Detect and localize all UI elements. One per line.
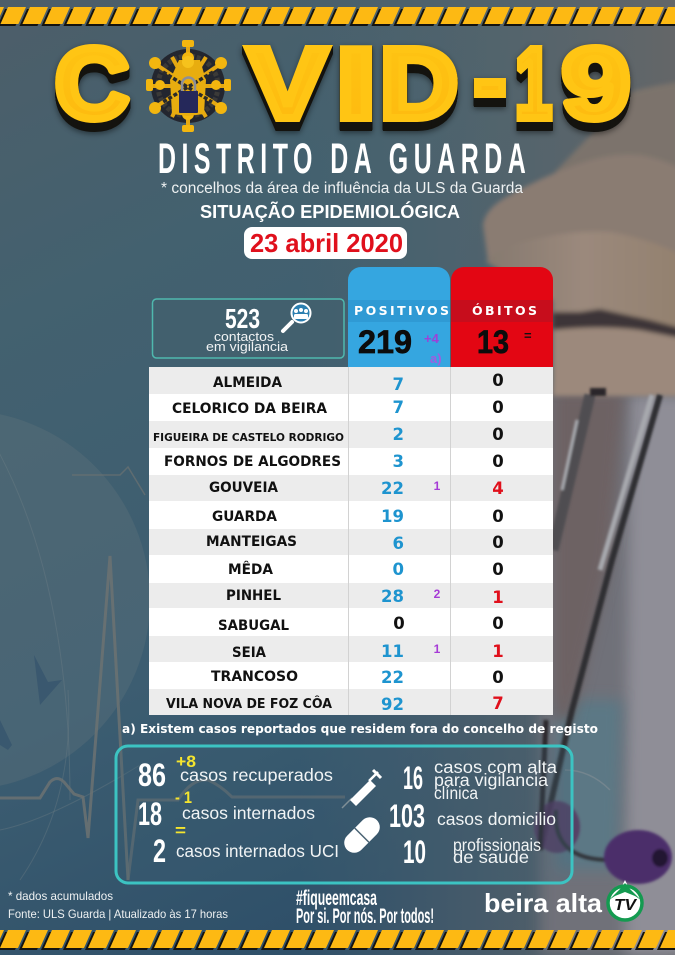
panel: positives header [348,267,450,367]
ICU: casos internados UCI [176,841,339,861]
health workers: 10 [403,834,426,870]
table: cases by municipality: 11 [381,642,404,661]
table: cases by municipality: 3 [393,452,404,471]
title: COVID-19: 9 [562,28,630,140]
subheading: SITUAÇÃO EPIDEMIOLÓGICA [200,201,460,222]
footnote: area of influence: * concelhos da área de influência da ULS da Guarda [161,180,523,197]
bottom hazard stripe [0,930,675,950]
table: cases by municipality: SEIA [232,645,267,661]
hospitalised: casos internados [182,803,315,823]
panel: deaths header [451,267,553,367]
table: cases by municipality: MANTEIGAS [206,534,297,550]
icon: virus with chain and padlock [146,40,231,132]
table: cases by municipality: SABUGAL [218,618,289,634]
table: cases by municipality: 19 [381,507,404,526]
heading: Distrito da Guarda: DISTRITO DA GUARDA [158,135,526,183]
table: cases by municipality: 2 [434,587,441,601]
table: cases by municipality: GUARDA [212,509,278,525]
table: cases by municipality [149,367,553,715]
hospitalised: - 1 [175,788,192,807]
logo: beira alta TV: beira alta [484,888,603,918]
hospitalised: 18 [138,796,162,832]
logo: beira alta TV [484,880,642,920]
panel: positives header: +4 [424,331,440,346]
table: cases by municipality: 0 [393,560,404,579]
table: cases by municipality: 0 [492,533,504,552]
footnote: source: Fonte: ULS Guarda | Atualizado às 17 horas [8,907,228,921]
panel: positives header: a) [430,351,442,366]
discharged: 16 [403,760,423,796]
table: cases by municipality: 7 [393,398,404,417]
at home: 103 [389,798,425,834]
hashtag slogan [296,887,434,928]
title: COVID-19: 1 [515,28,552,140]
at home: casos domicilio [437,809,556,829]
panel: deaths header: ÓBITOS [472,303,537,318]
panel: summary statistics [116,746,572,883]
panel: deaths header: = [524,328,532,343]
table: cases by municipality: CELORICO DA BEIRA [172,401,328,417]
title: COVID-19 [55,24,630,140]
ICU [153,821,339,869]
table: cases by municipality: 22 [381,479,404,498]
table: cases by municipality: FIGUEIRA DE CASTELO RODRIGO [153,431,344,444]
health workers [403,834,541,870]
logo: beira alta TV: TV [614,897,637,914]
table: cases by municipality: 22 [381,668,404,687]
table: cases by municipality: 0 [492,507,504,526]
table: cases by municipality: 0 [492,452,504,471]
icon: syringe [342,770,381,808]
stethoscope tubes [534,392,672,884]
table: cases by municipality: VILA NOVA DE FOZ CÔA [166,694,333,712]
footnote: source: * dados acumulados [8,889,113,903]
hashtag slogan: Por si. Por nós. Por todos! [296,905,434,928]
discharged: clínica [434,783,478,803]
title: COVID-19: C [55,28,129,140]
table: cases by municipality: 6 [393,534,404,553]
health workers: de saude [453,847,529,867]
icon: magnifier with people [283,304,310,331]
table: cases by municipality: 0 [393,614,405,633]
ICU: = [175,821,186,840]
title: COVID-19: V [248,28,327,140]
panel: deaths header: 13 [477,324,509,360]
discharged [403,757,557,803]
panel: positives header: POSITIVOS [354,303,449,318]
table: cases by municipality: PINHEL [226,588,281,604]
hashtag slogan: #fiqueemcasa [296,887,377,910]
icon: pill [340,813,384,857]
panel: contacts under surveillance: em vigilancia [206,340,288,354]
table: cases by municipality: 2 [393,425,404,444]
title: COVID-19: D [380,28,458,140]
table: cases by municipality: MÊDA [228,561,274,578]
hand fingers [483,82,675,396]
title: COVID-19: I [336,28,376,140]
table: cases by municipality: 0 [492,560,504,579]
recovered: casos recuperados [180,765,333,785]
table: cases by municipality: 0 [492,371,504,390]
date pill: 23 abril 2020 [250,228,403,258]
table: cases by municipality: 0 [492,668,504,687]
panel: contacts under surveillance [152,299,344,358]
panel: contacts under surveillance: contactos [214,330,274,344]
table: cases by municipality: 92 [381,695,404,714]
recovered: 86 [138,757,166,793]
note a): a) Existem casos reportados que residem fora do concelho de registo [122,721,598,736]
table: cases by municipality: 0 [492,425,504,444]
globe [0,410,150,790]
table: cases by municipality: 4 [492,479,504,498]
table: cases by municipality: FORNOS DE ALGODRES [164,454,341,470]
panel: contacts under surveillance: 523 [225,303,260,334]
table: cases by municipality: 7 [492,694,504,713]
table: cases by municipality: ALMEIDA [213,375,283,391]
hospitalised [138,788,315,832]
at home [389,798,556,834]
top hazard stripe [0,7,675,26]
table: cases by municipality: 1 [492,642,504,661]
table: cases by municipality: 1 [434,479,441,493]
table: cases by municipality: TRANCOSO [211,669,298,685]
panel: positives header: 219 [358,324,412,360]
ICU: 2 [153,833,166,869]
table: cases by municipality: 0 [492,398,504,417]
table: cases by municipality: GOUVEIA [209,480,279,496]
table: cases by municipality: 1 [434,642,441,656]
table: cases by municipality: 28 [381,587,404,606]
title: COVID-19: - [474,24,506,136]
recovered: +8 [176,752,196,771]
health workers: profissionais [453,835,541,855]
table: cases by municipality: 7 [393,375,404,394]
discharged: casos com alta [434,757,557,777]
table: cases by municipality: 0 [492,614,504,633]
ecg line [0,556,128,880]
recovered [138,752,333,793]
table: cases by municipality: 1 [492,588,504,607]
discharged: para vigilancia [434,770,548,790]
footnote: source [8,889,228,921]
